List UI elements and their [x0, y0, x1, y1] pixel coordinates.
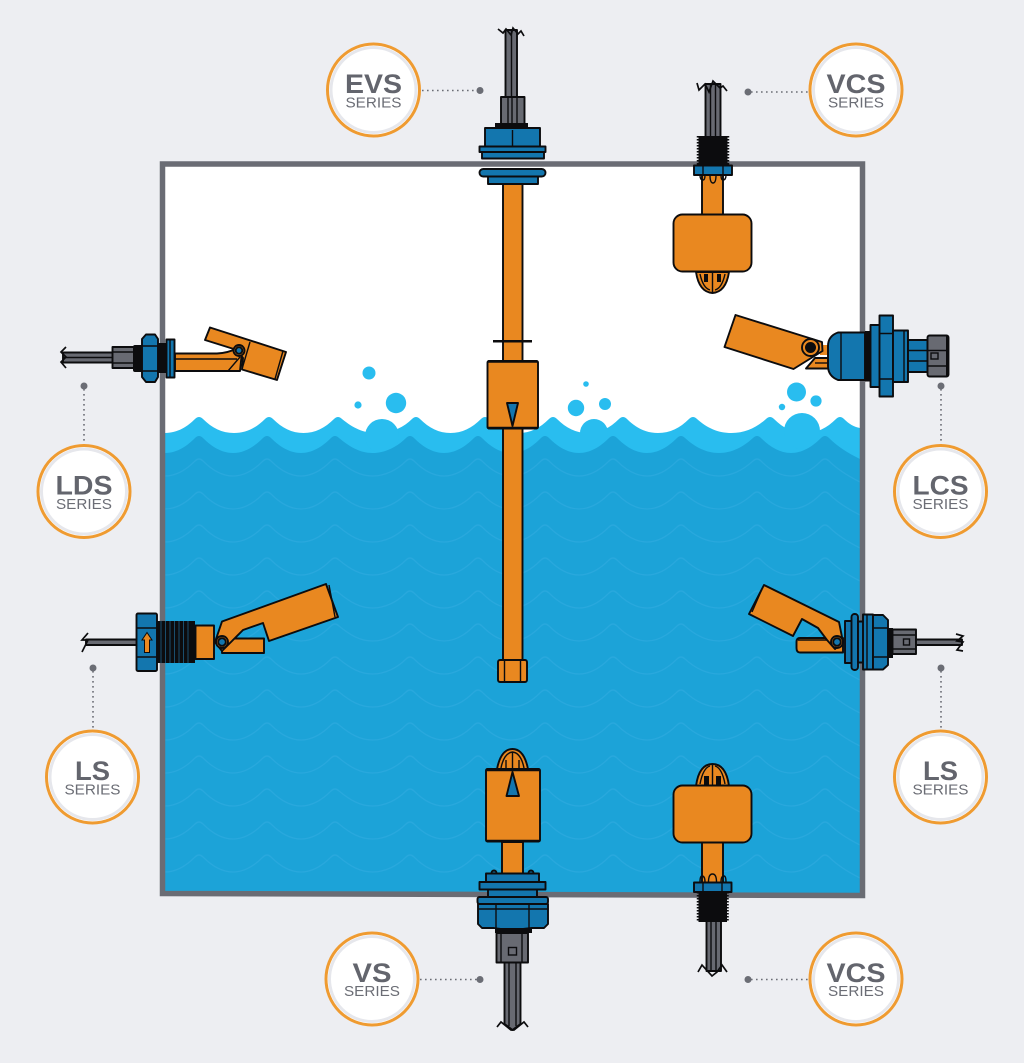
float: [674, 786, 752, 842]
switch: LDS, left upper: [61, 328, 286, 382]
body: [845, 614, 888, 670]
cable: [61, 347, 113, 368]
connector: [888, 628, 916, 658]
hex nut: [136, 614, 157, 671]
callout: VS series: [326, 933, 484, 1025]
connector: [495, 97, 528, 128]
callout: VCS series, top: VCS: [826, 69, 886, 99]
cap: [696, 764, 729, 786]
float: [674, 214, 752, 272]
callout: LCS series: SERIES: [912, 496, 968, 513]
arm: [222, 638, 264, 653]
pivot: [234, 345, 244, 356]
callout: VCS series, top: SERIES: [828, 94, 884, 112]
tank frame: [162, 164, 862, 896]
bubbles: [354, 366, 822, 453]
cap: [497, 749, 528, 769]
leader: [744, 88, 809, 96]
pivot: [216, 636, 228, 648]
callout: VCS series, top: [744, 44, 902, 136]
stem: [702, 175, 723, 215]
threads inner: [158, 343, 167, 373]
callout: LDS series: [38, 382, 130, 538]
leader: [744, 976, 809, 983]
flange: [166, 340, 174, 378]
float: [724, 315, 822, 369]
cable: [498, 28, 524, 97]
threads: [157, 621, 195, 663]
callout: VCS series, bottom: VCS: [826, 958, 886, 988]
end nut: [498, 660, 527, 682]
body: [196, 626, 214, 659]
threaded body: [698, 136, 728, 166]
arm: [175, 348, 242, 371]
cap: [696, 272, 729, 293]
water: [165, 366, 860, 896]
stem: [502, 842, 523, 874]
callout: VS series: VS: [352, 958, 392, 988]
callout: LS series, right: LS: [923, 756, 958, 786]
threaded body: [698, 892, 728, 922]
callout: LS series, right: [894, 664, 986, 823]
callout: LS series, left: [46, 664, 138, 823]
callout: VCS series, bottom: [744, 933, 902, 1025]
flanges: [478, 870, 548, 930]
callout: EVS series: [328, 44, 484, 136]
cable: [916, 634, 963, 651]
connector: [928, 336, 949, 376]
leader: [422, 87, 484, 94]
switch: LS, left lower: [82, 584, 338, 671]
nut: [694, 874, 732, 892]
callout: EVS series: EVS: [345, 69, 402, 99]
float: [205, 328, 286, 380]
callout: LS series, right: SERIES: [912, 782, 968, 798]
float: [215, 584, 338, 651]
nut: [142, 334, 158, 382]
switch: VS, bottom centre: [478, 749, 548, 1030]
body: [828, 316, 928, 396]
connector: [495, 928, 532, 962]
switch: EVS, top centre: [480, 28, 546, 682]
float: [486, 769, 540, 842]
callout: LCS series: LCS: [912, 470, 968, 500]
hex nut and flanges: [480, 128, 546, 184]
arm: [806, 345, 830, 368]
switch: LCS, right upper: [724, 315, 949, 396]
switch: VCS, top right: [674, 81, 752, 293]
callout: EVS series: SERIES: [346, 94, 402, 112]
callout: VCS series, bottom: SERIES: [828, 983, 884, 1000]
float: [488, 361, 538, 428]
surface wave: [165, 417, 860, 470]
arm: [796, 638, 843, 652]
leader: [80, 382, 88, 445]
switch: VCS, bottom right: [674, 764, 752, 976]
pivot: [802, 339, 819, 356]
callout: LDS series: LDS: [56, 470, 112, 500]
pivot: [831, 636, 843, 648]
callout: LS series, left: SERIES: [64, 782, 120, 798]
threads: [133, 345, 143, 372]
callout: LCS series: [894, 382, 986, 538]
cable: [698, 921, 727, 976]
connector: [112, 347, 135, 368]
switch: LS, right lower: [749, 585, 963, 670]
leader: [90, 664, 96, 730]
float: [749, 585, 843, 649]
cable: [82, 633, 137, 652]
callout: LS series, left: LS: [75, 756, 110, 786]
cable: [697, 81, 727, 138]
leader: [938, 382, 944, 445]
collar: [493, 340, 532, 342]
deep water: [165, 436, 860, 896]
callout: VS series: SERIES: [344, 983, 400, 1000]
arrow: [142, 632, 152, 652]
tank interior: [163, 164, 862, 896]
callout: LDS series: SERIES: [56, 496, 112, 513]
wave lines: [165, 459, 860, 878]
stem: [702, 842, 723, 883]
nut: [694, 166, 732, 183]
cable: [497, 962, 528, 1030]
leader: [938, 664, 944, 730]
leader: [420, 976, 484, 983]
stem: [503, 184, 522, 660]
